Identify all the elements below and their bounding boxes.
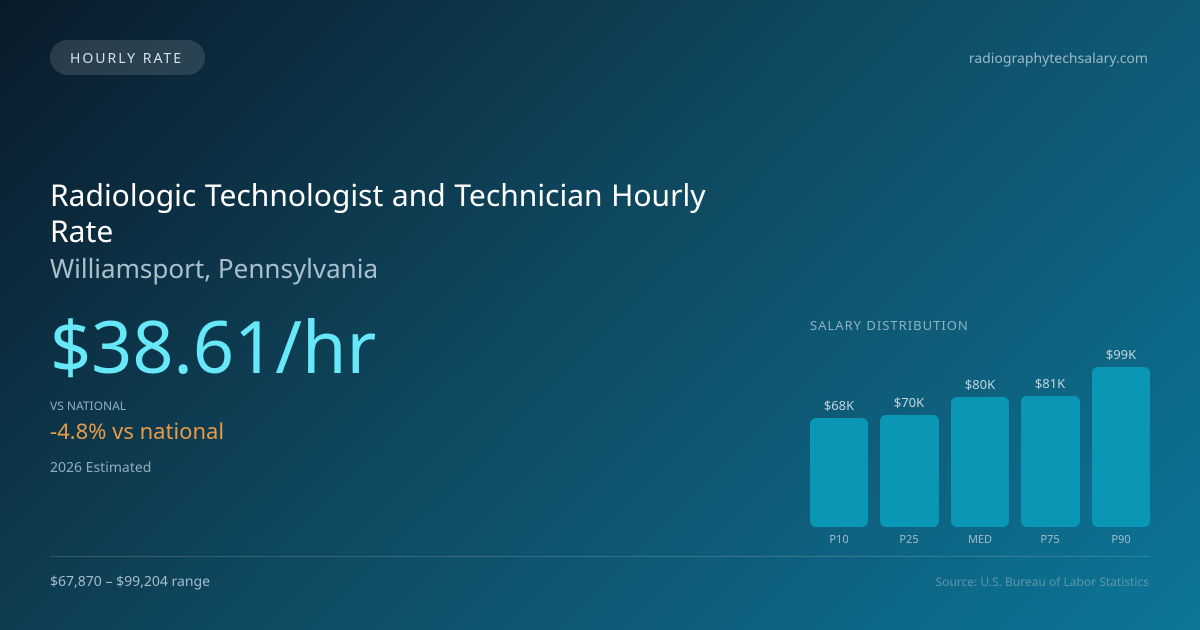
badge: hourly rate bbox=[50, 40, 205, 75]
bar P10 bbox=[810, 418, 868, 527]
label P25: P25 bbox=[899, 532, 919, 547]
value P90: $99K bbox=[1106, 345, 1136, 363]
chart heading: SALARY DISTRIBUTION bbox=[810, 316, 969, 334]
label P75: P75 bbox=[1040, 532, 1060, 547]
title: Radiologic Technologist and Technician Hourly Rate bbox=[50, 174, 706, 251]
bar chart: salary distribution bbox=[810, 316, 1150, 547]
site url: radiographytechsalary.com bbox=[969, 49, 1148, 68]
label MED: MED bbox=[968, 532, 992, 547]
label P10: P10 bbox=[829, 532, 849, 547]
value P75: $81K bbox=[1035, 374, 1065, 392]
vs national value: -4.8% vs national bbox=[50, 416, 224, 446]
bar P90 bbox=[1092, 367, 1150, 527]
year note: 2026 Estimated bbox=[50, 458, 151, 477]
range note: $67,870 – $99,204 range bbox=[50, 572, 210, 591]
label P90: P90 bbox=[1111, 532, 1131, 547]
bar P75 bbox=[1021, 396, 1080, 527]
value MED: $80K bbox=[965, 375, 995, 393]
vs national label: VS NATIONAL bbox=[50, 397, 126, 414]
bar MED bbox=[951, 397, 1009, 527]
main hourly value: $38.61/hr bbox=[50, 297, 376, 395]
value P10: $68K bbox=[824, 396, 854, 414]
badge: hourly rate: HOURLY RATE bbox=[70, 49, 183, 68]
source note: Source: U.S. Bureau of Labor Statistics bbox=[936, 573, 1149, 590]
value P25: $70K bbox=[894, 393, 924, 411]
bar P25 bbox=[880, 415, 939, 527]
subtitle: location: Williamsport, Pennsylvania bbox=[50, 250, 378, 286]
